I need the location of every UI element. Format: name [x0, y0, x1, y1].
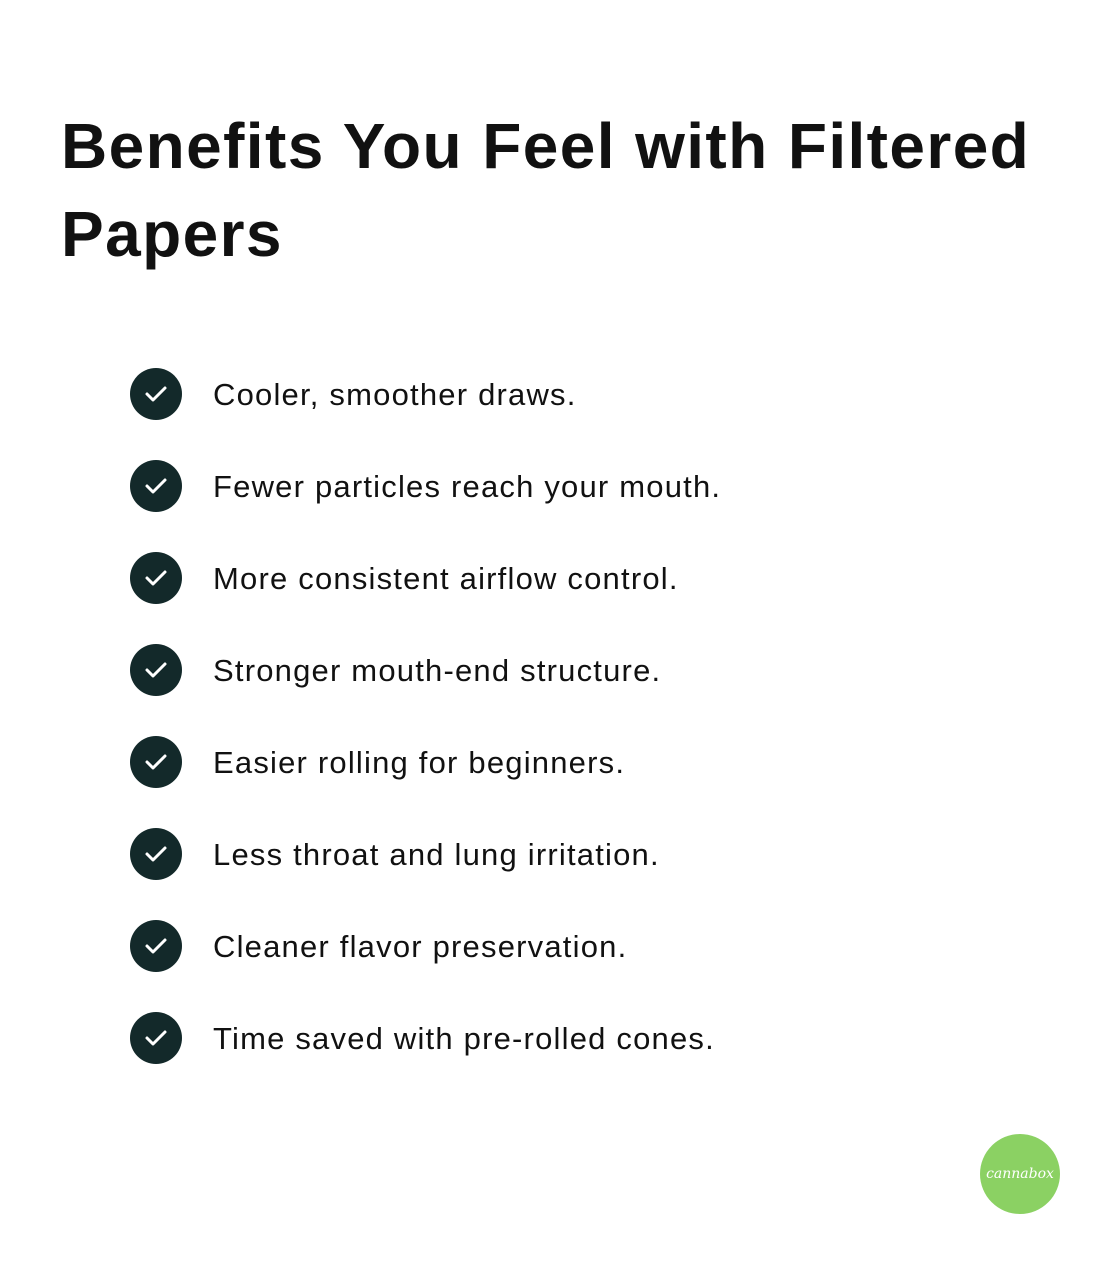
list item 2: [130, 460, 721, 512]
title: [61, 110, 1030, 270]
list item 2: Fewer particles reach your mouth.: [213, 469, 721, 504]
list item 6: Less throat and lung irritation.: [213, 837, 660, 872]
list item 4: [130, 644, 661, 696]
list item 1: Cooler, smoother draws.: [213, 377, 577, 412]
list item 3: More consistent airflow control.: [213, 561, 679, 596]
list item 5: Easier rolling for beginners.: [213, 745, 625, 780]
logo: cannabox: cannabox: [986, 1166, 1054, 1182]
list item 1: [130, 368, 577, 420]
list item 5: [130, 736, 625, 788]
list item 7: Cleaner flavor preservation.: [213, 929, 627, 964]
list item 4: Stronger mouth-end structure.: [213, 653, 661, 688]
title: Papers: [61, 198, 283, 270]
list item 8: Time saved with pre-rolled cones.: [213, 1021, 715, 1056]
list item 7: [130, 920, 627, 972]
logo: cannabox: [980, 1134, 1060, 1214]
title: Benefits You Feel with Filtered: [61, 110, 1030, 182]
list item 8: [130, 1012, 715, 1064]
list item 6: [130, 828, 660, 880]
list item 3: [130, 552, 679, 604]
